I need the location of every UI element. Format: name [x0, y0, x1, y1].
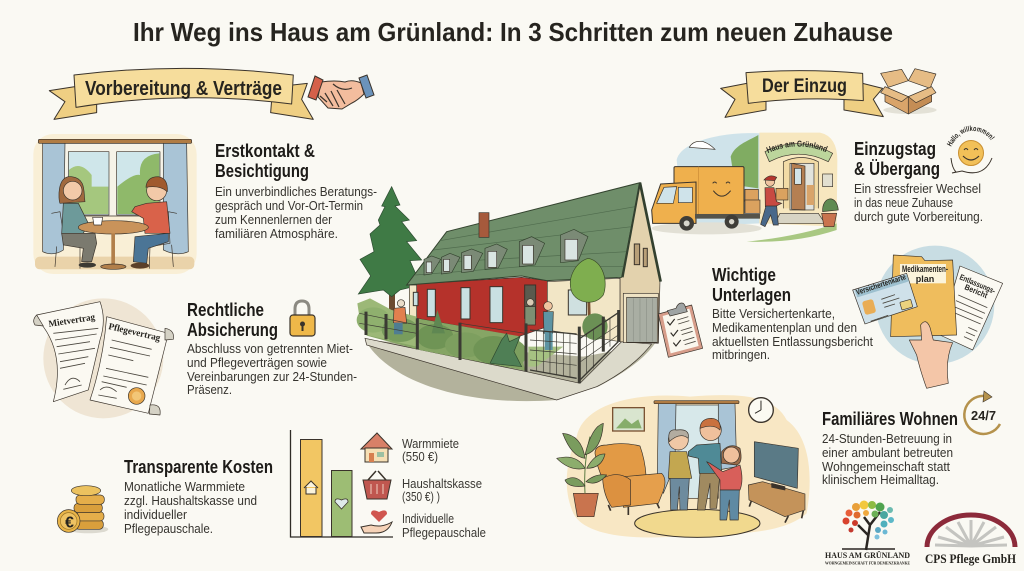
text: Wichtige Unterlagen: mitbringen.	[712, 347, 770, 362]
icon: house	[361, 433, 392, 462]
clock	[749, 398, 773, 422]
logo: Haus am Grünland: HAUS AM GRÜNLAND	[825, 551, 910, 560]
text: Einzugstag & Übergang: Einzugstag	[854, 139, 936, 159]
text: Familiäres Wohnen	[822, 409, 958, 487]
logo: CPS Pflege GmbH	[925, 515, 1016, 566]
text: Rechtliche Absicherung: Präsenz.	[187, 382, 232, 397]
senior woman	[668, 430, 692, 510]
text: Transparente Kosten	[124, 457, 273, 536]
text: Transparente Kosten: individueller	[124, 507, 188, 522]
garage	[623, 293, 658, 343]
illustration: house am Grünland	[357, 183, 661, 401]
chimney	[479, 213, 489, 237]
text: Einzugstag & Übergang: durch gute Vorbereitung.	[854, 209, 983, 224]
illustration: family in living room	[557, 395, 810, 537]
legend labels: Haushaltskasse	[402, 477, 482, 491]
icon: basket	[363, 471, 391, 499]
illustration: contracts: Pflegevertrag	[107, 322, 161, 344]
text: Familiäres Wohnen: klinischem Heimalltag.	[822, 472, 939, 487]
garden beds	[357, 298, 563, 371]
banner: Vorbereitung & Verträge: Vorbereitung & Verträge	[85, 78, 282, 100]
fir tree	[358, 187, 422, 317]
armchair	[595, 444, 665, 515]
text: Familiäres Wohnen: 24-Stunden-Betreuung in	[822, 431, 952, 446]
icon: 24/7 clock arrow	[964, 391, 1000, 434]
illustration: documents in hand: plan	[916, 274, 934, 284]
illustration: moving truck at the house: Haus am Grünland	[766, 140, 828, 153]
text: Einzugstag & Übergang	[854, 139, 983, 224]
text: Rechtliche Absicherung	[187, 300, 357, 397]
truck	[652, 167, 760, 231]
illustration: contracts: Mietvertrag	[48, 313, 96, 330]
gable wall	[620, 183, 660, 343]
mover	[761, 176, 788, 227]
picture frame	[613, 408, 644, 431]
bar: Haushaltskasse	[332, 470, 352, 536]
boxes	[745, 189, 760, 213]
icon: stack of coins	[57, 486, 108, 533]
plant	[557, 423, 607, 517]
text: Wichtige Unterlagen: Bitte Versichertenkarte,	[712, 306, 835, 321]
roof	[407, 183, 640, 285]
illustration: contracts	[34, 298, 174, 418]
illustration: documents in hand: Entlassungs-	[958, 273, 997, 296]
text: Einzugstag & Übergang: Ein stressfreier Wechsel	[854, 181, 981, 196]
discharge report	[940, 266, 1003, 350]
text: Transparente Kosten: Pflegepauschale.	[124, 521, 213, 536]
insurance card	[853, 273, 917, 324]
icon: moving box	[881, 69, 937, 114]
text: Transparente Kosten: zzgl. Haushaltskasse und	[124, 493, 257, 508]
adult man	[688, 418, 722, 510]
text: Wichtige Unterlagen: Wichtige	[712, 265, 776, 285]
text: Rechtliche Absicherung: Abschluss von getrennten Miet-	[187, 341, 353, 356]
text: Rechtliche Absicherung: und Pflegeverträgen sowie	[187, 355, 327, 370]
text: Erstkontakt & Besichtigung: gespräch und Vor-Ort-Termin	[215, 198, 363, 213]
text: Wichtige Unterlagen: Unterlagen	[712, 285, 791, 305]
illustration: moving truck at the house	[651, 132, 839, 242]
text: Einzugstag & Übergang: & Übergang	[854, 159, 940, 179]
people	[393, 299, 553, 350]
text: Transparente Kosten: Monatliche Warmmiete	[124, 479, 245, 494]
banner: Vorbereitung & Verträge	[49, 68, 313, 119]
rug	[635, 509, 760, 537]
illustration: documents in hand: Bericht	[963, 283, 989, 300]
folder	[891, 255, 957, 337]
windows	[413, 244, 647, 323]
text: Familiäres Wohnen: Familiäres Wohnen	[822, 409, 958, 429]
text: Erstkontakt & Besichtigung: Ein unverbindliches Beratungs-	[215, 184, 377, 199]
icon: clipboard checklist	[658, 303, 703, 357]
text: Wichtige Unterlagen	[712, 265, 873, 362]
ground and pavement	[365, 338, 655, 401]
banner: Der Einzug	[721, 71, 883, 117]
icon: 24/7 clock arrow: 24/7	[971, 408, 996, 423]
illustration: documents in hand	[853, 246, 1003, 388]
text: Erstkontakt & Besichtigung: familiären Atmosphäre.	[215, 226, 338, 241]
younger woman	[707, 446, 742, 520]
text: Erstkontakt & Besichtigung	[215, 141, 377, 241]
text: Wichtige Unterlagen: Medikamentenplan und den	[712, 320, 857, 335]
window and curtains	[654, 401, 739, 498]
table	[78, 217, 148, 269]
logo: Haus am Grünland	[825, 500, 911, 566]
man at table	[131, 177, 177, 269]
legend labels	[402, 437, 486, 540]
illustration: first meeting at the window	[33, 134, 197, 274]
text: Familiäres Wohnen: einer ambulant betreuten	[822, 445, 953, 460]
text: Einzugstag & Übergang: in das neue Zuhause	[854, 195, 953, 210]
legend labels: (350 €) )	[402, 490, 440, 504]
tv stand	[748, 442, 805, 523]
small tree	[570, 258, 608, 340]
icon: handshake	[308, 75, 374, 109]
fence and gate	[359, 310, 619, 383]
dormers	[424, 229, 588, 275]
icon: smiley speech bubble	[946, 126, 995, 174]
text: Rechtliche Absicherung: Absicherung	[187, 320, 278, 340]
red wall	[417, 277, 547, 337]
illustration: documents in hand: Medikamenten-	[902, 264, 948, 274]
logo: Haus am Grünland: WOHNGEMEINSCHAFT FÜR DEMENZKRANKE	[825, 560, 911, 566]
text: Transparente Kosten: Transparente Kosten	[124, 457, 273, 477]
banner: Der Einzug: Der Einzug	[762, 76, 847, 97]
text: Erstkontakt & Besichtigung: zum Kennenlernen der	[215, 212, 333, 227]
illustration: documents in hand: Versichertenkarte	[855, 272, 907, 297]
text: Wichtige Unterlagen: aktuellsten Entlassungsbericht	[712, 334, 873, 349]
title: Ihr Weg ins Haus am Grünland: In 3 Schritten zum neuen Zuhause	[133, 17, 893, 47]
legend labels: Individuelle	[402, 512, 454, 526]
bar: Warmmiete	[300, 440, 322, 536]
hand	[909, 322, 953, 388]
text: Rechtliche Absicherung: Rechtliche	[187, 300, 264, 320]
legend labels: (550 €)	[402, 450, 438, 464]
icon: hand with heart	[361, 510, 392, 533]
legend labels: Pflegepauschale	[402, 526, 486, 540]
bar chart: costs	[290, 430, 486, 540]
text: Erstkontakt & Besichtigung: Besichtigung	[215, 161, 309, 181]
text: Familiäres Wohnen: Wohngemeinschaft statt	[822, 459, 950, 474]
text: Erstkontakt & Besichtigung: Erstkontakt &	[215, 141, 315, 161]
text: Rechtliche Absicherung: Vereinbarungen zur 24-Stunden-	[187, 369, 357, 384]
icon: padlock	[290, 301, 315, 336]
woman at table	[52, 177, 97, 268]
front wall	[547, 278, 620, 342]
tree	[842, 500, 895, 550]
shop front	[765, 144, 838, 227]
legend labels: Warmmiete	[402, 437, 459, 451]
icon: stack of coins: €	[65, 514, 74, 531]
icon: smiley speech bubble: Hallo, willkommen!	[946, 126, 995, 146]
